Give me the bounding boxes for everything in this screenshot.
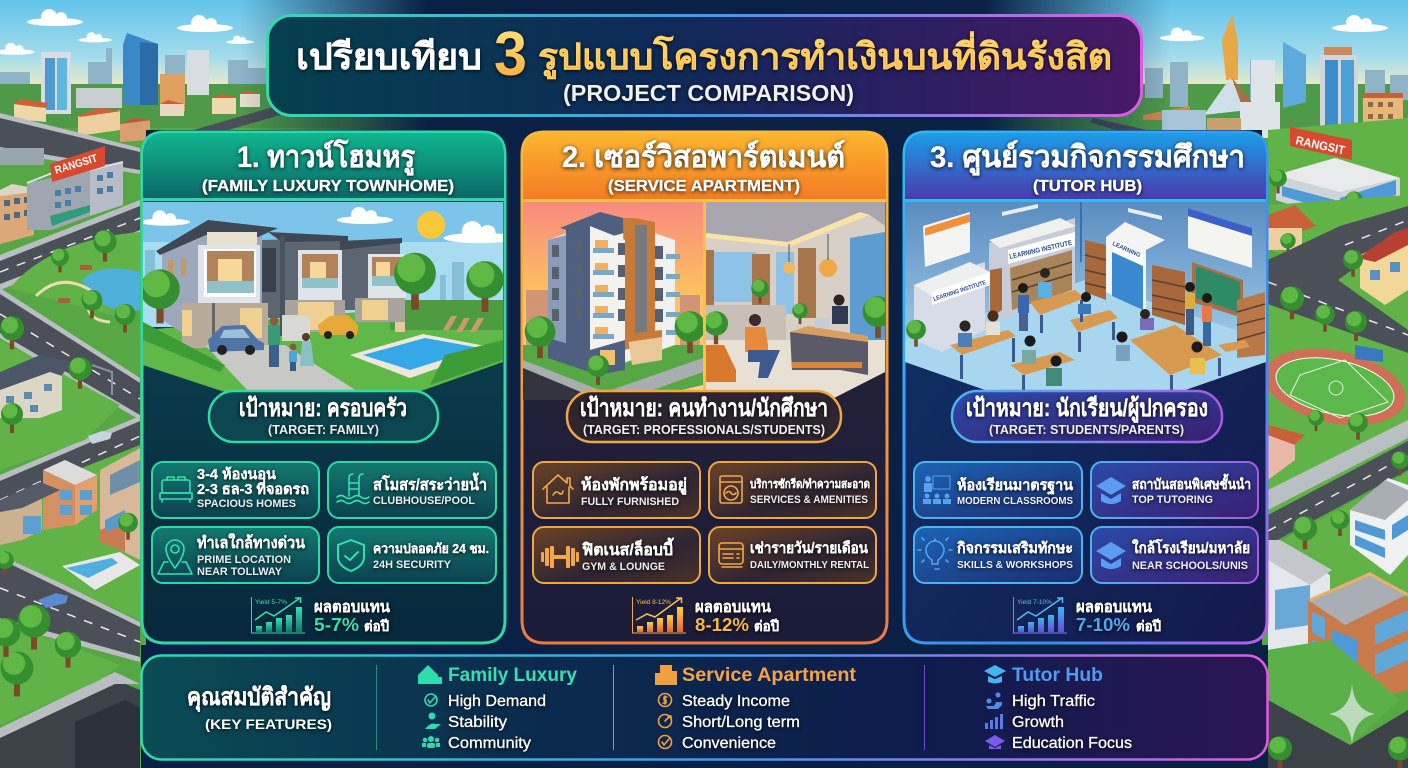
yield text 3: 7-10% (1076, 615, 1130, 635)
target pill 2: (TARGET: PROFESSIONALS/STUDENTS) (583, 422, 825, 437)
yield text 2: 8-12% (695, 615, 749, 635)
column: family luxury: Stability (448, 714, 507, 731)
column: service apartment: Steady Income (682, 693, 790, 710)
yield chart 3 (1014, 597, 1067, 633)
illustration: apartment lobby (704, 202, 893, 400)
card: services and amenities (709, 462, 876, 518)
header 1 (143, 133, 504, 201)
card: 24h security (328, 527, 496, 583)
column: service apartment: Convenience (682, 735, 776, 752)
card: 24h security: 24H SECURITY (373, 559, 452, 571)
card: spacious homes (152, 462, 319, 518)
panel 1: family luxury townhome (140, 132, 516, 643)
card: fully furnished: FULLY FURNISHED (581, 496, 679, 508)
illustration: townhomes with pool (143, 202, 503, 392)
target pill 3: (TARGET: STUDENTS/PARENTS) (989, 422, 1184, 437)
yield text 3: ต่อปี (1136, 618, 1161, 634)
target pill 1 (209, 391, 438, 442)
target pill 1: เป้าหมาย: ครอบครัว (239, 395, 407, 422)
target pill 1: (TARGET: FAMILY) (268, 422, 379, 437)
icon: building (655, 665, 677, 685)
header 2: 2. เซอร์วิสอพาร์ตเมนต์ (562, 140, 845, 174)
icon: light bulb (918, 538, 952, 569)
right city (1060, 14, 1408, 768)
card: modern classrooms: MODERN CLASSROOMS (957, 495, 1073, 507)
card: prime location: ทำเลใกล้ทางด่วน (197, 533, 305, 552)
card: gym and lounge (533, 527, 700, 583)
card: services and amenities: SERVICES & AMENITIES (750, 494, 868, 506)
house 1 (162, 235, 262, 332)
family (268, 325, 280, 345)
yield text 2: ผลตอบแทน (695, 599, 771, 616)
column: family luxury: High Demand (448, 693, 546, 710)
card: gym and lounge: ฟิตเนส/ล็อบบี้ (581, 537, 674, 559)
left road network (0, 105, 280, 768)
icon: map pin (158, 540, 192, 574)
column: family luxury: Community (448, 735, 531, 752)
card: fully furnished: ห้องพักพร้อมอยู่ (581, 476, 687, 496)
left city buildings and parks (0, 146, 140, 725)
card: prime location: NEAR TOLLWAY (197, 566, 283, 578)
icon: washing machine (720, 476, 742, 503)
card: 24h security: ความปลอดภัย 24 ชม. (373, 541, 489, 556)
card: services and amenities: บริการซักรีด/ทำความสะอาด (750, 477, 870, 491)
column: tutor hub: High Traffic (1012, 693, 1095, 710)
header 2 (523, 133, 886, 202)
yield chart 1: Yield 5-7% (255, 600, 288, 606)
icon: classroom (923, 476, 951, 504)
card: near schools: NEAR SCHOOLS/UNIS (1132, 560, 1248, 572)
card: top tutoring: TOP TUTORING (1132, 494, 1213, 506)
house 2 (262, 238, 340, 318)
lamps (1002, 204, 1162, 220)
yield chart 3: Yield 7-10% (1017, 600, 1053, 606)
icon: graduation cap (1096, 542, 1126, 569)
yield text 1: ผลตอบแทน (314, 599, 390, 616)
RANGSIT sign right (1290, 127, 1352, 160)
card: modern classrooms (914, 462, 1082, 518)
column: tutor hub: Growth (1012, 714, 1064, 731)
icon: shield (338, 540, 364, 571)
column: tutor hub (984, 665, 1132, 752)
card: spacious homes: 3-4 ห้องนอน (197, 466, 276, 483)
yield text 1: 5-7% (314, 615, 359, 635)
title main heading (296, 20, 1112, 106)
card: prime location: PRIME LOCATION (197, 554, 291, 566)
yield text 2 (695, 599, 779, 635)
header 3: (TUTOR HUB) (1033, 178, 1142, 195)
header 3: 3. ศูนย์รวมกิจกรรมศึกษา (930, 140, 1245, 176)
card: skills and workshops: SKILLS & WORKSHOPS (957, 559, 1073, 571)
header 2: (SERVICE APARTMENT) (608, 178, 800, 195)
key features heading: คุณสมบัติสำคัญ (187, 684, 331, 713)
card: spacious homes: 2-3 ธล-3 ที่จอดรถ (197, 478, 309, 498)
key features heading (187, 684, 332, 732)
target pill 2: เป้าหมาย: คนทำงาน/นักศึกษา (580, 395, 828, 422)
card: gym and lounge: GYM & LOUNGE (582, 561, 665, 573)
card: clubhouse and pool (328, 462, 496, 518)
cars (208, 325, 264, 352)
posters (923, 212, 970, 267)
yield chart 2 (632, 597, 686, 633)
panel 2: service apartment (522, 132, 893, 643)
target pill 3 (952, 391, 1222, 442)
tables (950, 290, 1250, 375)
card: skills and workshops (914, 527, 1082, 583)
card: top tutoring (1091, 462, 1258, 518)
icon: bed (160, 477, 192, 502)
driveway (205, 345, 355, 390)
column: service apartment: Service Apartment (682, 665, 857, 686)
icon: calendar (719, 543, 743, 567)
yield text 1 (314, 599, 390, 635)
person and desk (745, 327, 768, 352)
card: daily/monthly rental: DAILY/MONTHLY RENTAL (750, 559, 870, 571)
header 1: 1. ทาวน์โฮมหรู (237, 138, 415, 176)
illustration: tutoring classroom (905, 202, 1266, 390)
yield text 3 (1076, 599, 1161, 635)
card: fully furnished (533, 462, 700, 518)
column: family luxury: Family Luxury (448, 665, 577, 686)
icon: dumbbell (541, 546, 579, 568)
icon: house (543, 475, 573, 503)
illustration: tutoring classroom: LEARNING INSTITUTE (1009, 240, 1073, 261)
title main heading: 3 (494, 20, 527, 89)
card: daily/monthly rental: เช่ารายวัน/รายเดือน (750, 540, 869, 557)
card: near schools: ใกล้โรงเรียน/มหาลัย (1132, 538, 1250, 557)
column: tutor hub: Education Focus (1012, 735, 1132, 752)
card: daily/monthly rental (709, 527, 876, 583)
card: prime location (152, 527, 319, 583)
target pill 2 (567, 391, 841, 442)
RANGSIT sign left: RANGSIT (53, 152, 99, 177)
left city skyline (0, 9, 340, 142)
target pill 3: เป้าหมาย: นักเรียน/ผู้ปกครอง (966, 395, 1208, 423)
icon: house (418, 665, 442, 684)
icon: graduation cap (1096, 477, 1126, 504)
title main heading: (PROJECT COMPARISON) (563, 80, 854, 106)
title banner (268, 16, 1142, 116)
icon: swimming pool (337, 474, 369, 504)
yield chart 1 (252, 597, 305, 633)
header 1: (FAMILY LUXURY TOWNHOME) (202, 178, 454, 195)
yield chart 2: Yield 8-12% (636, 600, 672, 606)
column: service apartment (655, 665, 857, 752)
title main heading: รูปแบบโครงการทำเงินบนที่ดินรังสิต (538, 31, 1112, 80)
RANGSIT sign left (50, 146, 105, 182)
wall (282, 315, 310, 341)
column: family luxury (418, 665, 577, 752)
house 3 (340, 240, 400, 310)
card: skills and workshops: กิจกรรมเสริมทักษะ (957, 539, 1073, 557)
column: service apartment: Short/Long term (682, 714, 800, 731)
card: top tutoring: สถาบันสอนพิเศษชั้นนำ (1132, 473, 1251, 492)
key features heading: (KEY FEATURES) (205, 716, 332, 732)
card: modern classrooms: ห้องเรียนมาตรฐาน (957, 477, 1074, 495)
yield text 3: ผลตอบแทน (1076, 599, 1152, 616)
illustration: tutoring classroom: LEARNING INSTITUTE (933, 280, 987, 303)
illustration: tutoring classroom: LEARNING (1111, 241, 1141, 259)
title main heading: เปรียบเทียบ (296, 36, 482, 77)
yield text 2: ต่อปี (754, 618, 779, 634)
RANGSIT sign right: RANGSIT (1294, 133, 1347, 157)
column: tutor hub: Tutor Hub (1012, 665, 1103, 686)
illustration: apartment tower (523, 202, 705, 400)
card: near schools (1091, 527, 1258, 583)
icon: cap (984, 665, 1006, 684)
booths (989, 218, 1075, 320)
card: spacious homes: SPACIOUS HOMES (197, 498, 296, 510)
students (958, 268, 1212, 386)
hedge and pool (143, 322, 225, 372)
key features panel (142, 656, 1268, 760)
yield text 1: ต่อปี (364, 618, 389, 634)
header 3 (905, 133, 1266, 202)
panel 3: tutor hub (904, 132, 1267, 643)
card: clubhouse and pool: สโมสร/สระว่ายน้ำ (373, 472, 487, 494)
card: clubhouse and pool: CLUBHOUSE/POOL (373, 495, 475, 507)
